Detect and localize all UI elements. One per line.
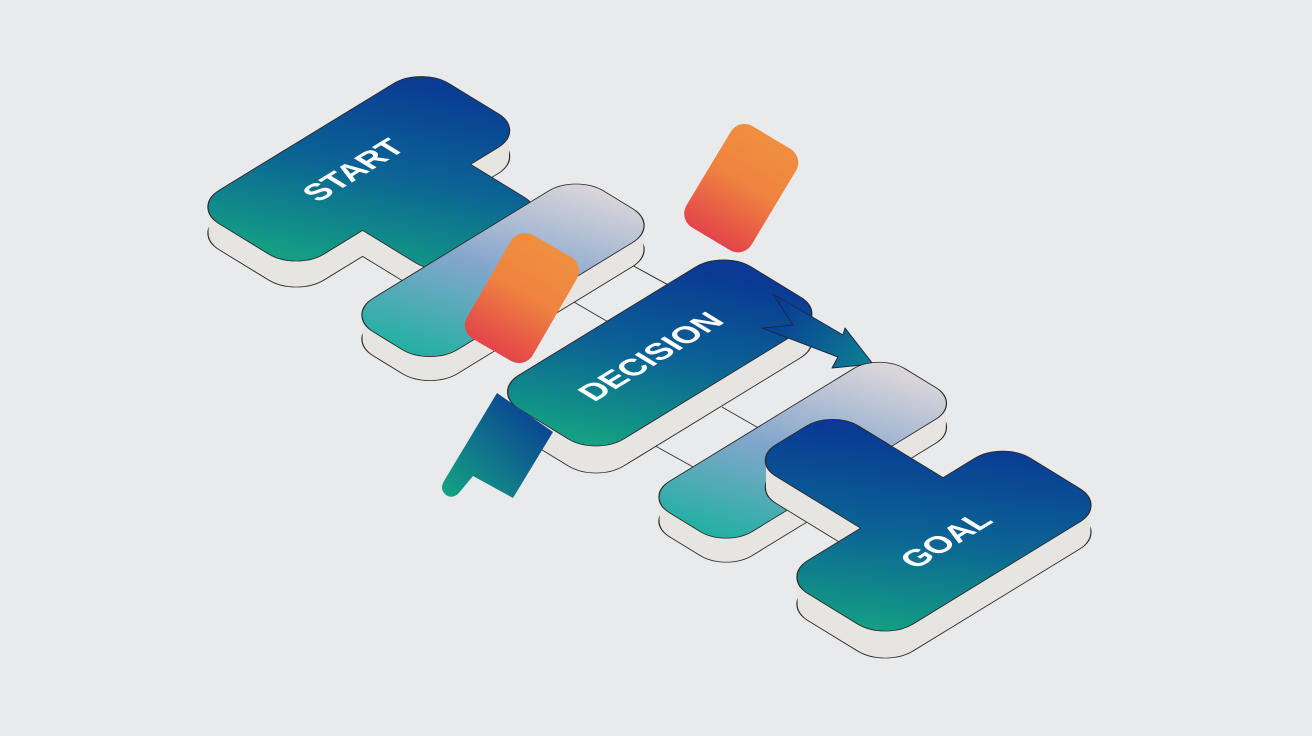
card: orange top — [678, 118, 804, 258]
label: decision: DECISION — [570, 307, 732, 406]
label: goal: GOAL — [891, 507, 1000, 573]
block: decision — [492, 251, 827, 482]
block: goal — [671, 374, 1106, 667]
block: light step 4 — [645, 353, 961, 571]
arrow: decision to goal — [762, 294, 873, 368]
block: light step 2 — [347, 175, 659, 390]
connector lines — [472, 242, 762, 468]
label: start: START — [294, 133, 413, 206]
icon: flag — [442, 393, 553, 498]
card: orange middle — [459, 227, 585, 369]
block: start — [193, 67, 606, 346]
